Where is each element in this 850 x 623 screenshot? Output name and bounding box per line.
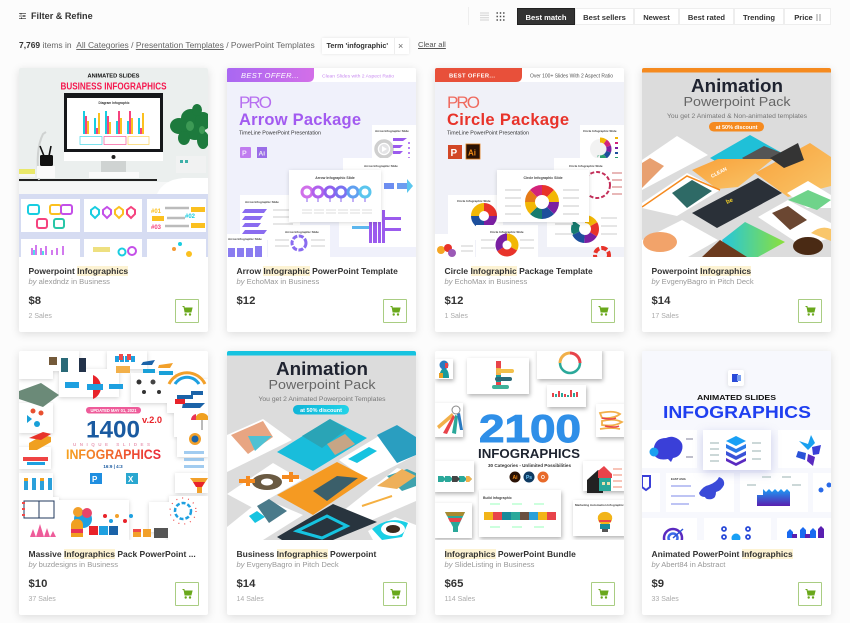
sort button: price: Price <box>794 13 813 22</box>
thumbnail: pro circle package: Circle Infographic Slide <box>583 129 617 133</box>
thumbnail: animated slides infographics: ANIMATED SLIDES <box>697 393 776 402</box>
thumbnail: animation powerpoint pack, orange: be <box>725 197 735 206</box>
product title: Arrow Infographic PowerPoint Template <box>236 266 398 276</box>
sort button: best sellers: Best sellers <box>583 13 626 22</box>
filter tag: term infographic <box>322 38 409 54</box>
author line: by buzdesigns in Business <box>28 560 118 569</box>
thumbnail: 2100 infographics: Ps <box>526 475 532 481</box>
author line: by Abert84 in Abstract <box>652 560 725 569</box>
thumbnail: animation powerpoint pack, teal: Powerpoint Pack <box>268 377 376 392</box>
thumbnail: 1400 unique slides infographics: 1400 <box>86 416 140 444</box>
thumbnail: 1400 unique slides infographics <box>19 352 208 540</box>
thumbnail: pro circle package: Circle Infographic Slide <box>569 164 603 168</box>
sort button: best rated <box>679 8 734 25</box>
thumbnail: pro circle package: Circle Package <box>447 111 569 129</box>
product card: massive infographics pack <box>19 351 208 615</box>
product title: Circle Infographic Package Template <box>444 266 593 276</box>
thumbnail: pro arrow package: Arrow Infographic Slide <box>228 237 262 241</box>
thumbnail: pro arrow package: Ai <box>258 150 265 158</box>
thumbnail: business infographics <box>19 68 208 257</box>
product card: infographics powerpoint bundle <box>435 351 624 615</box>
thumbnail: 1400 unique slides infographics: UNIQUE SLIDES <box>73 442 150 447</box>
icon: grid view <box>496 12 504 21</box>
filter tag: term infographic: Term 'infographic' <box>326 41 388 50</box>
filter and refine heading <box>19 11 93 21</box>
thumbnail: animated slides infographics: INFOGRAPHICS <box>663 402 811 422</box>
product title: Business Infographics Powerpoint <box>236 549 376 559</box>
thumbnail: pro circle package: PRO <box>447 93 480 112</box>
thumbnail: animated slides infographics: EAST ASIA <box>671 477 686 481</box>
price: $12 <box>444 295 463 307</box>
add to cart button <box>590 582 614 606</box>
clear all link: Clear all <box>418 40 446 49</box>
thumbnail: 2100 infographics: 30 Categories - Unlimited Possibilities <box>488 463 571 468</box>
product card: business infographics powerpoint <box>227 351 416 615</box>
thumbnail: 1400 unique slides infographics: 16:9 | 4:3 <box>103 464 123 469</box>
add to cart button <box>382 299 406 323</box>
thumbnail: pro circle package <box>435 68 624 257</box>
add to cart button <box>174 582 198 606</box>
price: $8 <box>28 295 41 307</box>
author line: by EvgenyBagro in Pitch Deck <box>236 560 339 569</box>
sales count: 37 Sales <box>28 596 56 603</box>
author line: by SlideListing in Business <box>444 560 534 569</box>
heading text: Filter & Refine <box>31 11 93 21</box>
add to cart button <box>798 582 822 606</box>
filter tag: term infographic: × <box>398 41 403 51</box>
sort button: trending <box>734 8 784 25</box>
thumbnail: pro circle package: Circle Infographic Slide <box>490 230 524 234</box>
thumbnail: pro circle package: P <box>450 148 458 159</box>
product title: Massive Infographics Pack PowerPoint ... <box>28 549 196 559</box>
thumbnail: animation powerpoint pack, teal: Animation <box>276 358 368 379</box>
sales count: 14 Sales <box>236 596 264 603</box>
thumbnail: animated slides infographics <box>642 367 831 540</box>
thumbnail: business infographics: #01 <box>151 209 162 215</box>
product card: powerpoint infographics by EvgenyBagro <box>642 68 831 332</box>
thumbnail: business infographics: ANIMATED SLIDES <box>88 74 140 80</box>
product card: arrow infographic template <box>227 68 416 332</box>
sort button: best match: Best match <box>526 13 566 22</box>
thumbnail: pro arrow package: TimeLine PowerPoint Presentation <box>239 130 321 136</box>
price: $14 <box>652 295 670 307</box>
thumbnail: business infographics: #02 <box>185 214 196 220</box>
icon: filter sliders <box>19 13 26 19</box>
thumbnail: pro arrow package: Arrow Infographic Slide <box>375 129 409 133</box>
product card: powerpoint infographics <box>19 68 208 332</box>
product title: Powerpoint Infographics <box>652 266 751 276</box>
thumbnail: pro circle package: BEST OFFER... <box>449 74 495 80</box>
thumbnail: pro arrow package: BEST OFFER... <box>241 71 299 80</box>
thumbnail: animation powerpoint pack, orange <box>642 68 831 257</box>
thumbnail: business infographics: Diagram Infographic <box>98 101 130 105</box>
author line: by alexdndz in Business <box>28 277 110 286</box>
thumbnail: pro arrow package: Arrow Package <box>239 111 361 129</box>
thumbnail: 2100 infographics: INFOGRAPHICS <box>478 446 580 461</box>
thumbnail: 2100 infographics: Marketing Automation Infographic <box>575 503 624 507</box>
sort button: newest <box>634 8 679 25</box>
price: $10 <box>28 578 47 590</box>
price: $9 <box>652 578 664 590</box>
sales count: 2 Sales <box>28 313 52 320</box>
sales count: 1 Sales <box>444 313 468 320</box>
sort button: trending: Trending <box>743 13 775 22</box>
price: $65 <box>444 578 463 590</box>
thumbnail: pro arrow package: Arrow Infographic Slide <box>315 176 355 180</box>
thumbnail: pro circle package: Ai <box>468 148 476 158</box>
thumbnail: 2100 infographics: Ai <box>512 475 518 481</box>
thumbnail: 1400 unique slides infographics: v.2.0 <box>142 415 162 425</box>
author line: by EchoMax in Business <box>444 277 527 286</box>
thumbnail: 2100 infographics: Build Infographic <box>483 496 512 500</box>
thumbnail: animation powerpoint pack, orange: Animation <box>691 75 783 96</box>
product title: Infographics PowerPoint Bundle <box>444 549 576 559</box>
product title: Animated PowerPoint Infographics <box>652 549 793 559</box>
thumbnail: animation powerpoint pack, orange: Powerpoint Pack <box>684 94 791 109</box>
thumbnail: pro circle package: Circle Infographic Slide <box>523 176 563 180</box>
add to cart button <box>590 299 614 323</box>
thumbnail: animation powerpoint pack, orange: CLEAN <box>710 166 728 180</box>
results summary breadcrumb: 7,769 items in All Categories / Presentation Templates / PowerPoint Templates <box>19 40 315 50</box>
product card: animated powerpoint infographics <box>642 351 831 615</box>
thumbnail: pro arrow package: Arrow Infographic Slide <box>245 200 279 204</box>
sales count: 17 Sales <box>652 313 679 320</box>
thumbnail: pro arrow package: Arrow Infographic Slide <box>285 230 319 234</box>
thumbnail: 2100 infographics <box>435 351 624 540</box>
thumbnail: pro arrow package: P <box>242 150 247 158</box>
thumbnail: pro circle package: Over 100+ Slides With 2 Aspect Ratio <box>530 73 613 79</box>
thumbnail: pro arrow package: Arrow Infographic Slide <box>364 164 398 168</box>
thumbnail: pro arrow package: PRO <box>239 93 272 112</box>
sort button: best match <box>517 8 575 25</box>
thumbnail: 1400 unique slides infographics: P <box>92 475 98 484</box>
toolbar: view toggles and sort buttons <box>468 7 504 25</box>
thumbnail: business infographics: BUSINESS INFOGRAPHICS <box>60 80 166 92</box>
thumbnail: animation powerpoint pack, teal <box>227 351 416 540</box>
thumbnail: pro arrow package: Clean Slides with 2 Aspect Ratio <box>322 73 394 78</box>
price: $12 <box>236 295 255 307</box>
sort button: best sellers <box>575 8 634 25</box>
product card: circle infographic package <box>435 68 624 332</box>
author line: by EchoMax in Business <box>236 277 319 286</box>
add to cart button <box>798 299 822 323</box>
thumbnail: 2100 infographics: O <box>541 475 545 481</box>
thumbnail: 1400 unique slides infographics: UPDATED MAY 01, 2021 <box>90 408 137 413</box>
thumbnail: pro circle package: Circle Infographic Slide <box>457 199 491 203</box>
thumbnail: animation powerpoint pack, orange: at 50% discount <box>716 125 758 131</box>
sales count: 33 Sales <box>652 596 679 603</box>
thumbnail: animation powerpoint pack, teal: You get 2 Animated Powerpoint Templates <box>258 396 386 403</box>
add to cart button <box>382 582 406 606</box>
thumbnail: pro circle package: TimeLine PowerPoint Presentation <box>447 130 529 136</box>
thumbnail: animation powerpoint pack, orange: You get 2 Animated & Non-animated templates <box>667 113 808 120</box>
price: $14 <box>236 578 255 590</box>
thumbnail: 1400 unique slides infographics: INFOGRAPHICS <box>66 446 161 462</box>
icon: list view <box>480 12 489 20</box>
sort button: best rated: Best rated <box>688 13 725 22</box>
sort button: price <box>784 8 831 25</box>
thumbnail: pro arrow package <box>227 68 416 257</box>
sort button: newest: Newest <box>643 13 670 22</box>
thumbnail: animation powerpoint pack, teal: at 50% discount <box>300 408 342 414</box>
thumbnail: 1400 unique slides infographics: X <box>128 475 134 484</box>
product title: Powerpoint Infographics <box>28 266 128 276</box>
thumbnail: business infographics: #03 <box>151 225 162 231</box>
thumbnail: 2100 infographics: 2100 <box>479 408 581 451</box>
add to cart button <box>174 299 198 323</box>
author line: by EvgenyBagro in Pitch Deck <box>652 277 754 286</box>
sales count: 114 Sales <box>444 596 475 603</box>
